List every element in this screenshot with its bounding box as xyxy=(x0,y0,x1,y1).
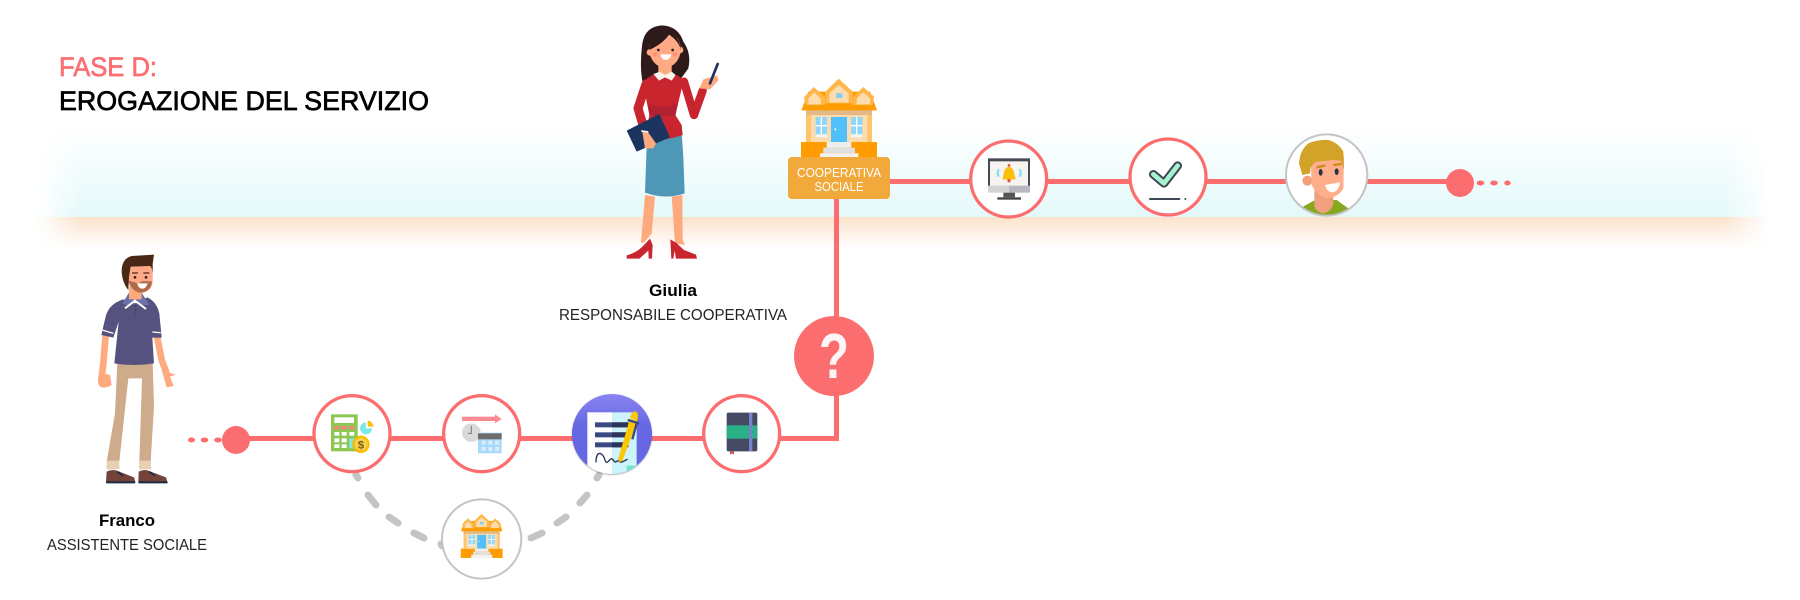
role: RESPONSABILE COOPERATIVA xyxy=(559,307,787,324)
node: clock and calendar xyxy=(444,396,520,472)
node: checkmark xyxy=(1130,139,1206,215)
character: Franco xyxy=(98,255,176,483)
start node with dotted lead-in xyxy=(188,426,250,454)
decision node: question mark: ? xyxy=(819,320,849,392)
decision node: question mark xyxy=(794,316,874,396)
node: dashed detour cooperative xyxy=(442,499,521,579)
title line: service delivery: EROGAZIONE DEL SERVIZIO xyxy=(59,86,429,116)
title line: phase: FASE D: xyxy=(59,52,157,82)
end node with dotted continuation xyxy=(1446,169,1511,197)
node: calculator and budget: $ xyxy=(358,439,365,451)
sign: cooperativa sociale: COOPERATIVA xyxy=(797,166,882,180)
name: Giulia xyxy=(649,281,698,300)
icon: cooperative building xyxy=(801,79,877,159)
connector: dashed detour through cooperative xyxy=(356,475,599,546)
node: notebook xyxy=(704,396,780,472)
connector: bottom timeline to cooperative xyxy=(236,196,836,438)
title xyxy=(59,52,429,116)
label: Franco xyxy=(47,511,207,554)
node: calculator and budget xyxy=(314,396,390,472)
name: Franco xyxy=(99,511,155,530)
connector: top timeline xyxy=(888,179,1460,184)
sign: cooperativa sociale xyxy=(788,157,890,199)
character: Giulia xyxy=(627,25,719,259)
role: ASSISTENTE SOCIALE xyxy=(47,537,207,554)
background band: sky and ground gradient xyxy=(36,125,1770,249)
node: monitor notification xyxy=(971,141,1047,217)
node: beneficiary portrait xyxy=(1286,134,1367,218)
sign: cooperativa sociale: SOCIALE xyxy=(814,180,864,194)
node: signed document xyxy=(572,394,652,476)
label: Giulia xyxy=(559,281,787,324)
